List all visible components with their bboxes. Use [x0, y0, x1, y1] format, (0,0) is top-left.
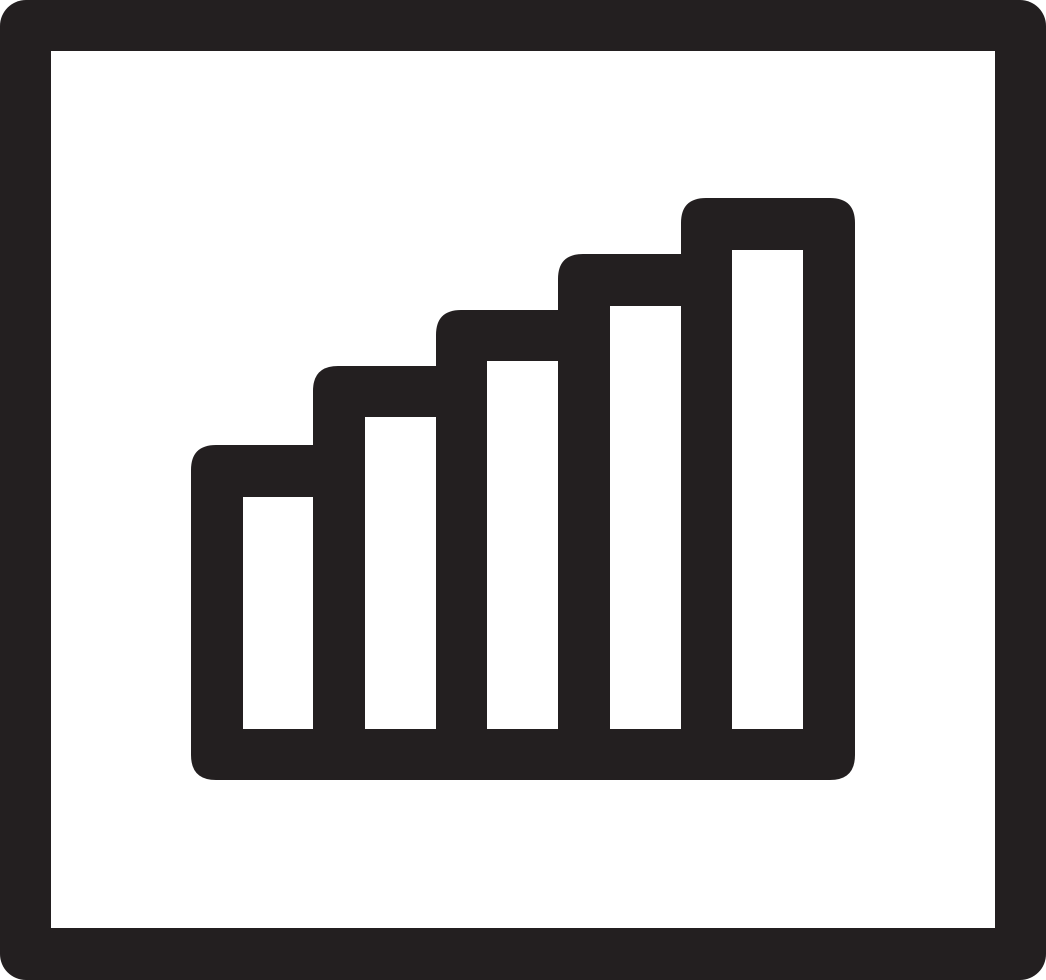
- bar chart: [191, 198, 855, 780]
